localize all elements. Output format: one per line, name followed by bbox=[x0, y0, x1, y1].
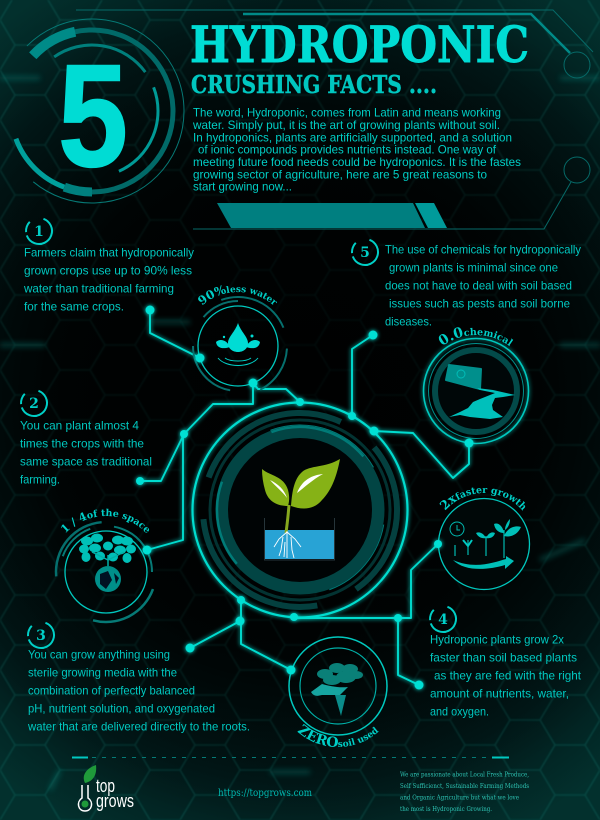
fact 2: times the crops with the bbox=[20, 436, 144, 450]
connector nodes bbox=[136, 306, 474, 690]
badge 4 bbox=[426, 602, 460, 636]
fact 4: faster than soil based plants bbox=[430, 650, 577, 664]
intro paragraph bbox=[192, 106, 521, 194]
subtitle: CRUSHING FACTS .... bbox=[191, 70, 437, 99]
footer about text: Self Sufficienct, Sustainable Farming Methods bbox=[400, 783, 529, 790]
logo: top grows: grows bbox=[96, 791, 134, 811]
fact 1: for the same crops. bbox=[24, 300, 124, 314]
intro paragraph: growing sector of agriculture, here are 5 great reasons to bbox=[193, 167, 487, 181]
badge 4: 4 bbox=[438, 612, 448, 628]
label: zero soil used: ZEROsoil used bbox=[298, 724, 379, 747]
fact 4: Hydroponic plants grow 2x bbox=[430, 632, 564, 646]
big number 5 with rings: 5 bbox=[58, 34, 128, 197]
badge 5 bbox=[348, 235, 382, 269]
fact 5: issues such as pests and soil borne bbox=[389, 296, 570, 310]
footer about text: the most is Hydroponic Growing. bbox=[400, 806, 492, 813]
central hub rings bbox=[176, 386, 424, 634]
panel: zero soil used icon bbox=[288, 636, 388, 747]
fact 5: diseases. bbox=[385, 314, 432, 328]
label: 90% less water: 90%less water bbox=[198, 285, 277, 305]
title: HYDROPONIC bbox=[190, 15, 529, 74]
intro paragraph: meeting future food needs could be hydroponics. It is the fastes bbox=[193, 155, 521, 169]
fact 4: and oxygen. bbox=[430, 704, 489, 718]
badge 1 bbox=[22, 214, 56, 248]
panel: 1/4 of the space icon bbox=[54, 508, 154, 624]
circuit connector lines bbox=[140, 310, 469, 685]
fact 1: Farmers claim that hydroponically bbox=[24, 246, 194, 260]
footer about text: We are passionate about Local Fresh Produce, bbox=[400, 772, 529, 778]
badge 5: 5 bbox=[360, 245, 370, 261]
badge 3 bbox=[24, 618, 58, 652]
fact 5: The use of chemicals for hydroponically bbox=[385, 242, 581, 256]
fact 2: farming. bbox=[20, 472, 60, 486]
footer about text bbox=[400, 772, 529, 813]
label: 0.0 chemical: 0.0chemical bbox=[438, 327, 514, 346]
panel: 0.0 chemical icon bbox=[420, 327, 532, 448]
label: 2x faster growth: 2xfaster growth bbox=[440, 488, 526, 511]
fact 3: water that are delivered directly to the roots. bbox=[27, 719, 250, 733]
header frame lines bbox=[76, 10, 593, 229]
badge 2: 2 bbox=[29, 396, 39, 412]
fact 3: combination of perfectly balanced bbox=[28, 683, 195, 697]
website url: https://topgrows.com bbox=[218, 787, 312, 799]
fact 5 bbox=[348, 235, 581, 328]
fact 1: grown crops use up to 90% less bbox=[24, 264, 192, 278]
intro paragraph: The word, Hydroponic, comes from Latin and means working bbox=[193, 106, 501, 120]
intro paragraph: start growing now... bbox=[193, 180, 292, 194]
footer divider bbox=[72, 756, 509, 758]
big number 5 with rings bbox=[0, 0, 222, 241]
panel: 2x faster growth icon bbox=[438, 488, 530, 590]
footer about text: and Organic Agriculture but what we love bbox=[400, 794, 519, 802]
intro paragraph: of ionic compounds provides nutrients instead. One way of bbox=[198, 143, 497, 157]
fact 3: pH, nutrient solution, and oxygenated bbox=[28, 701, 215, 715]
header accent bar bbox=[217, 203, 447, 228]
fact 3: You can grow anything using bbox=[28, 647, 170, 661]
fact 2: You can plant almost 4 bbox=[20, 418, 139, 432]
fact 2: same space as traditional bbox=[20, 454, 152, 468]
intro paragraph: water. Simply put, it is the art of growing plants without soil. bbox=[192, 118, 500, 132]
fact 3 bbox=[24, 618, 250, 733]
badge 1: 1 bbox=[34, 224, 44, 240]
fact 3: sterile growing media with the bbox=[28, 665, 177, 679]
logo: top grows: top bbox=[96, 776, 115, 796]
fact 5: grown plants is minimal since one bbox=[389, 260, 558, 274]
icon: plant in water bbox=[262, 459, 340, 560]
fact 1 bbox=[22, 214, 194, 314]
logo: top grows bbox=[78, 765, 134, 811]
fact 4: amount of nutrients, water, bbox=[430, 686, 569, 700]
badge 3: 3 bbox=[36, 628, 46, 644]
fact 4: as they are fed with the right bbox=[434, 668, 582, 682]
fact 1: water than traditional farming bbox=[23, 282, 174, 296]
fact 4 bbox=[426, 602, 582, 718]
fact 5: does not have to deal with soil based bbox=[385, 278, 572, 292]
label: 1/4 of the space: 1 / 4of the space bbox=[61, 508, 149, 533]
intro paragraph: In hydroponics, plants are artificially supported, and a solution bbox=[193, 130, 512, 144]
panel: 90% less water icon bbox=[192, 285, 288, 392]
fact 2 bbox=[17, 386, 152, 486]
